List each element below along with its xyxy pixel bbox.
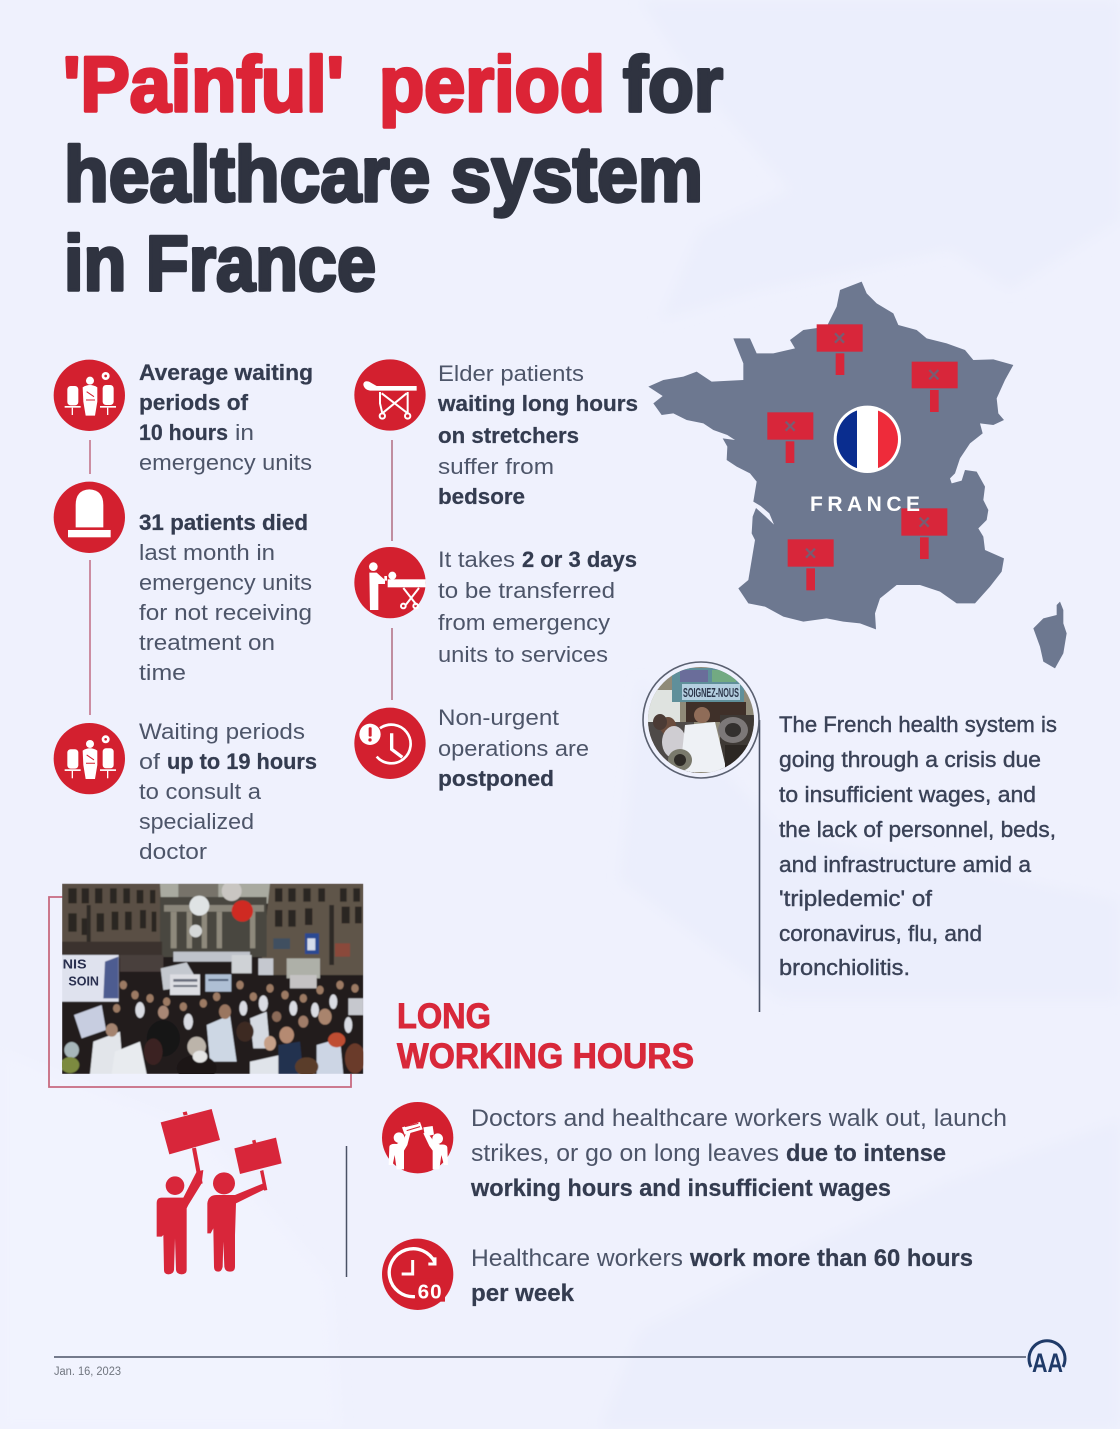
text: 31 patients died: for not receiving bbox=[139, 600, 312, 625]
logo: Anadolu Agency: AA bbox=[1032, 1348, 1063, 1378]
text: 2 or 3 days transfer: It takes bbox=[438, 547, 515, 572]
text: French health system paragraph: The French health system is bbox=[779, 712, 1057, 737]
text: strikes and walkouts: Doctors and healthcare workers walk out, launch bbox=[471, 1105, 1007, 1132]
text: average waiting periods: in bbox=[235, 420, 254, 445]
text: strikes and walkouts: strikes, or go on long leaves bbox=[471, 1140, 779, 1167]
protest sign 3 bbox=[767, 412, 813, 463]
heading: long working hours: LONG bbox=[397, 997, 491, 1036]
icon: waiting room 10 hours bbox=[54, 360, 125, 431]
footer rule bbox=[54, 1356, 1026, 1358]
text: average waiting periods bbox=[139, 360, 313, 475]
connector line: middle column bottom bbox=[391, 628, 393, 700]
text: waiting periods up to 19 hours: doctor bbox=[139, 839, 207, 864]
text: elder patients bbox=[437, 361, 638, 509]
icon: patient transfer bbox=[354, 547, 426, 618]
text: 2 or 3 days transfer: from emergency bbox=[438, 610, 610, 635]
banner lettering line two: SOIN bbox=[68, 974, 99, 989]
text: 31 patients died: 31 patients died bbox=[139, 510, 308, 535]
date: Jan. 16, 2023 bbox=[54, 1366, 121, 1378]
circular photo bbox=[643, 662, 759, 778]
text: 31 patients died: time bbox=[139, 660, 186, 685]
text: French health system paragraph: 'tripledemic' of bbox=[779, 886, 933, 911]
icon: stretcher bbox=[354, 359, 426, 431]
text: 31 patients died: emergency units bbox=[139, 570, 312, 595]
icon: strike bbox=[382, 1102, 453, 1173]
text: elder patients: on stretchers bbox=[438, 423, 579, 448]
heading: long working hours bbox=[397, 997, 694, 1076]
text: 60 hours per week: per week bbox=[471, 1280, 574, 1307]
divider beside protest icon bbox=[346, 1146, 348, 1277]
connector line: middle column top bbox=[391, 440, 393, 541]
title bbox=[63, 40, 723, 307]
title: in France bbox=[64, 219, 376, 307]
text: 2 or 3 days transfer: to be transferred bbox=[438, 578, 615, 603]
map label: France: FRANCE bbox=[810, 493, 920, 516]
text: 31 patients died: treatment on bbox=[139, 630, 275, 655]
text: French health system paragraph: bronchiolitis. bbox=[779, 955, 910, 980]
icon: waiting room 19 hours bbox=[54, 723, 125, 794]
line from circular photo down the paragraph bbox=[758, 720, 760, 1012]
text: average waiting periods: 10 hours bbox=[139, 420, 228, 445]
protest sign 2 bbox=[912, 362, 958, 412]
text: non-urgent operations: operations are bbox=[438, 736, 589, 761]
icon: 60 hour clock bbox=[382, 1239, 453, 1310]
text: 2 or 3 days transfer: units to services bbox=[438, 642, 608, 667]
text: French health system paragraph: coronavirus, flu, and bbox=[779, 921, 982, 946]
map of France bbox=[648, 282, 1067, 668]
protest sign 1 bbox=[817, 324, 863, 375]
connector line: left column top bbox=[89, 440, 91, 474]
text: strikes and walkouts: due to intense bbox=[786, 1140, 946, 1167]
text: elder patients: bedsore bbox=[438, 484, 525, 509]
text: elder patients: waiting long hours bbox=[437, 391, 638, 416]
text: waiting periods up to 19 hours: Waiting periods bbox=[139, 719, 305, 744]
text: waiting periods up to 19 hours: to consult a bbox=[139, 779, 262, 804]
text: French health system paragraph: the lack of personnel, beds, bbox=[779, 817, 1056, 842]
text: strikes and walkouts bbox=[470, 1105, 1007, 1202]
text: French health system paragraph: to insufficient wages, and bbox=[779, 782, 1036, 807]
mainland France bbox=[648, 282, 1013, 629]
text: 2 or 3 days transfer bbox=[438, 547, 637, 667]
text: elder patients: suffer from bbox=[438, 454, 554, 479]
title: for bbox=[623, 40, 723, 128]
text: French health system paragraph: going through a crisis due bbox=[779, 747, 1041, 772]
heading: long working hours: WORKING HOURS bbox=[397, 1037, 694, 1076]
Corsica bbox=[1033, 602, 1067, 668]
icon: tombstone bbox=[54, 482, 125, 553]
title: period bbox=[379, 40, 605, 128]
text: elder patients: Elder patients bbox=[438, 361, 584, 386]
protest sign 5 bbox=[788, 539, 834, 590]
text: 60 hours per week: Healthcare workers bbox=[471, 1245, 683, 1272]
text: French health system paragraph: and infrastructure amid a bbox=[779, 852, 1032, 877]
icon: clock and exclamation bbox=[354, 708, 426, 779]
text: 2 or 3 days transfer: 2 or 3 days bbox=[522, 547, 637, 572]
title: healthcare system bbox=[64, 130, 703, 218]
title: 'Painful' bbox=[63, 40, 344, 128]
text: waiting periods up to 19 hours: specialized bbox=[139, 809, 254, 834]
text: average waiting periods: emergency units bbox=[139, 450, 312, 475]
text: non-urgent operations: postponed bbox=[438, 766, 554, 791]
text: waiting periods up to 19 hours bbox=[139, 719, 317, 864]
icon: 60 hour clock: 60 bbox=[418, 1280, 442, 1303]
text: non-urgent operations: Non-urgent bbox=[438, 705, 559, 730]
photo frame bbox=[49, 897, 351, 1087]
photo: protest crowd bbox=[61, 881, 365, 1082]
text: 60 hours per week bbox=[471, 1245, 973, 1307]
banner lettering: NIS bbox=[63, 956, 87, 971]
protest sign 4 bbox=[901, 508, 947, 559]
text: 31 patients died: last month in bbox=[139, 540, 275, 565]
text: average waiting periods: periods of bbox=[139, 390, 249, 415]
text: waiting periods up to 19 hours: up to 19 hours bbox=[167, 749, 317, 774]
French flag bbox=[834, 406, 901, 473]
text: French health system paragraph bbox=[779, 712, 1057, 980]
connector line: left column bottom bbox=[89, 560, 91, 715]
circular photo: SOIGNEZ-NOUS bbox=[683, 685, 739, 700]
text: 60 hours per week: work more than 60 hours bbox=[689, 1245, 973, 1272]
text: average waiting periods: Average waiting bbox=[139, 360, 313, 385]
icon: protesters with signs bbox=[157, 1109, 282, 1274]
text: strikes and walkouts: working hours and insufficient wages bbox=[470, 1175, 891, 1202]
text: 31 patients died bbox=[139, 510, 312, 685]
logo: Anadolu Agency bbox=[1029, 1341, 1065, 1378]
text: waiting periods up to 19 hours: of bbox=[139, 749, 161, 774]
text: non-urgent operations bbox=[438, 705, 589, 791]
